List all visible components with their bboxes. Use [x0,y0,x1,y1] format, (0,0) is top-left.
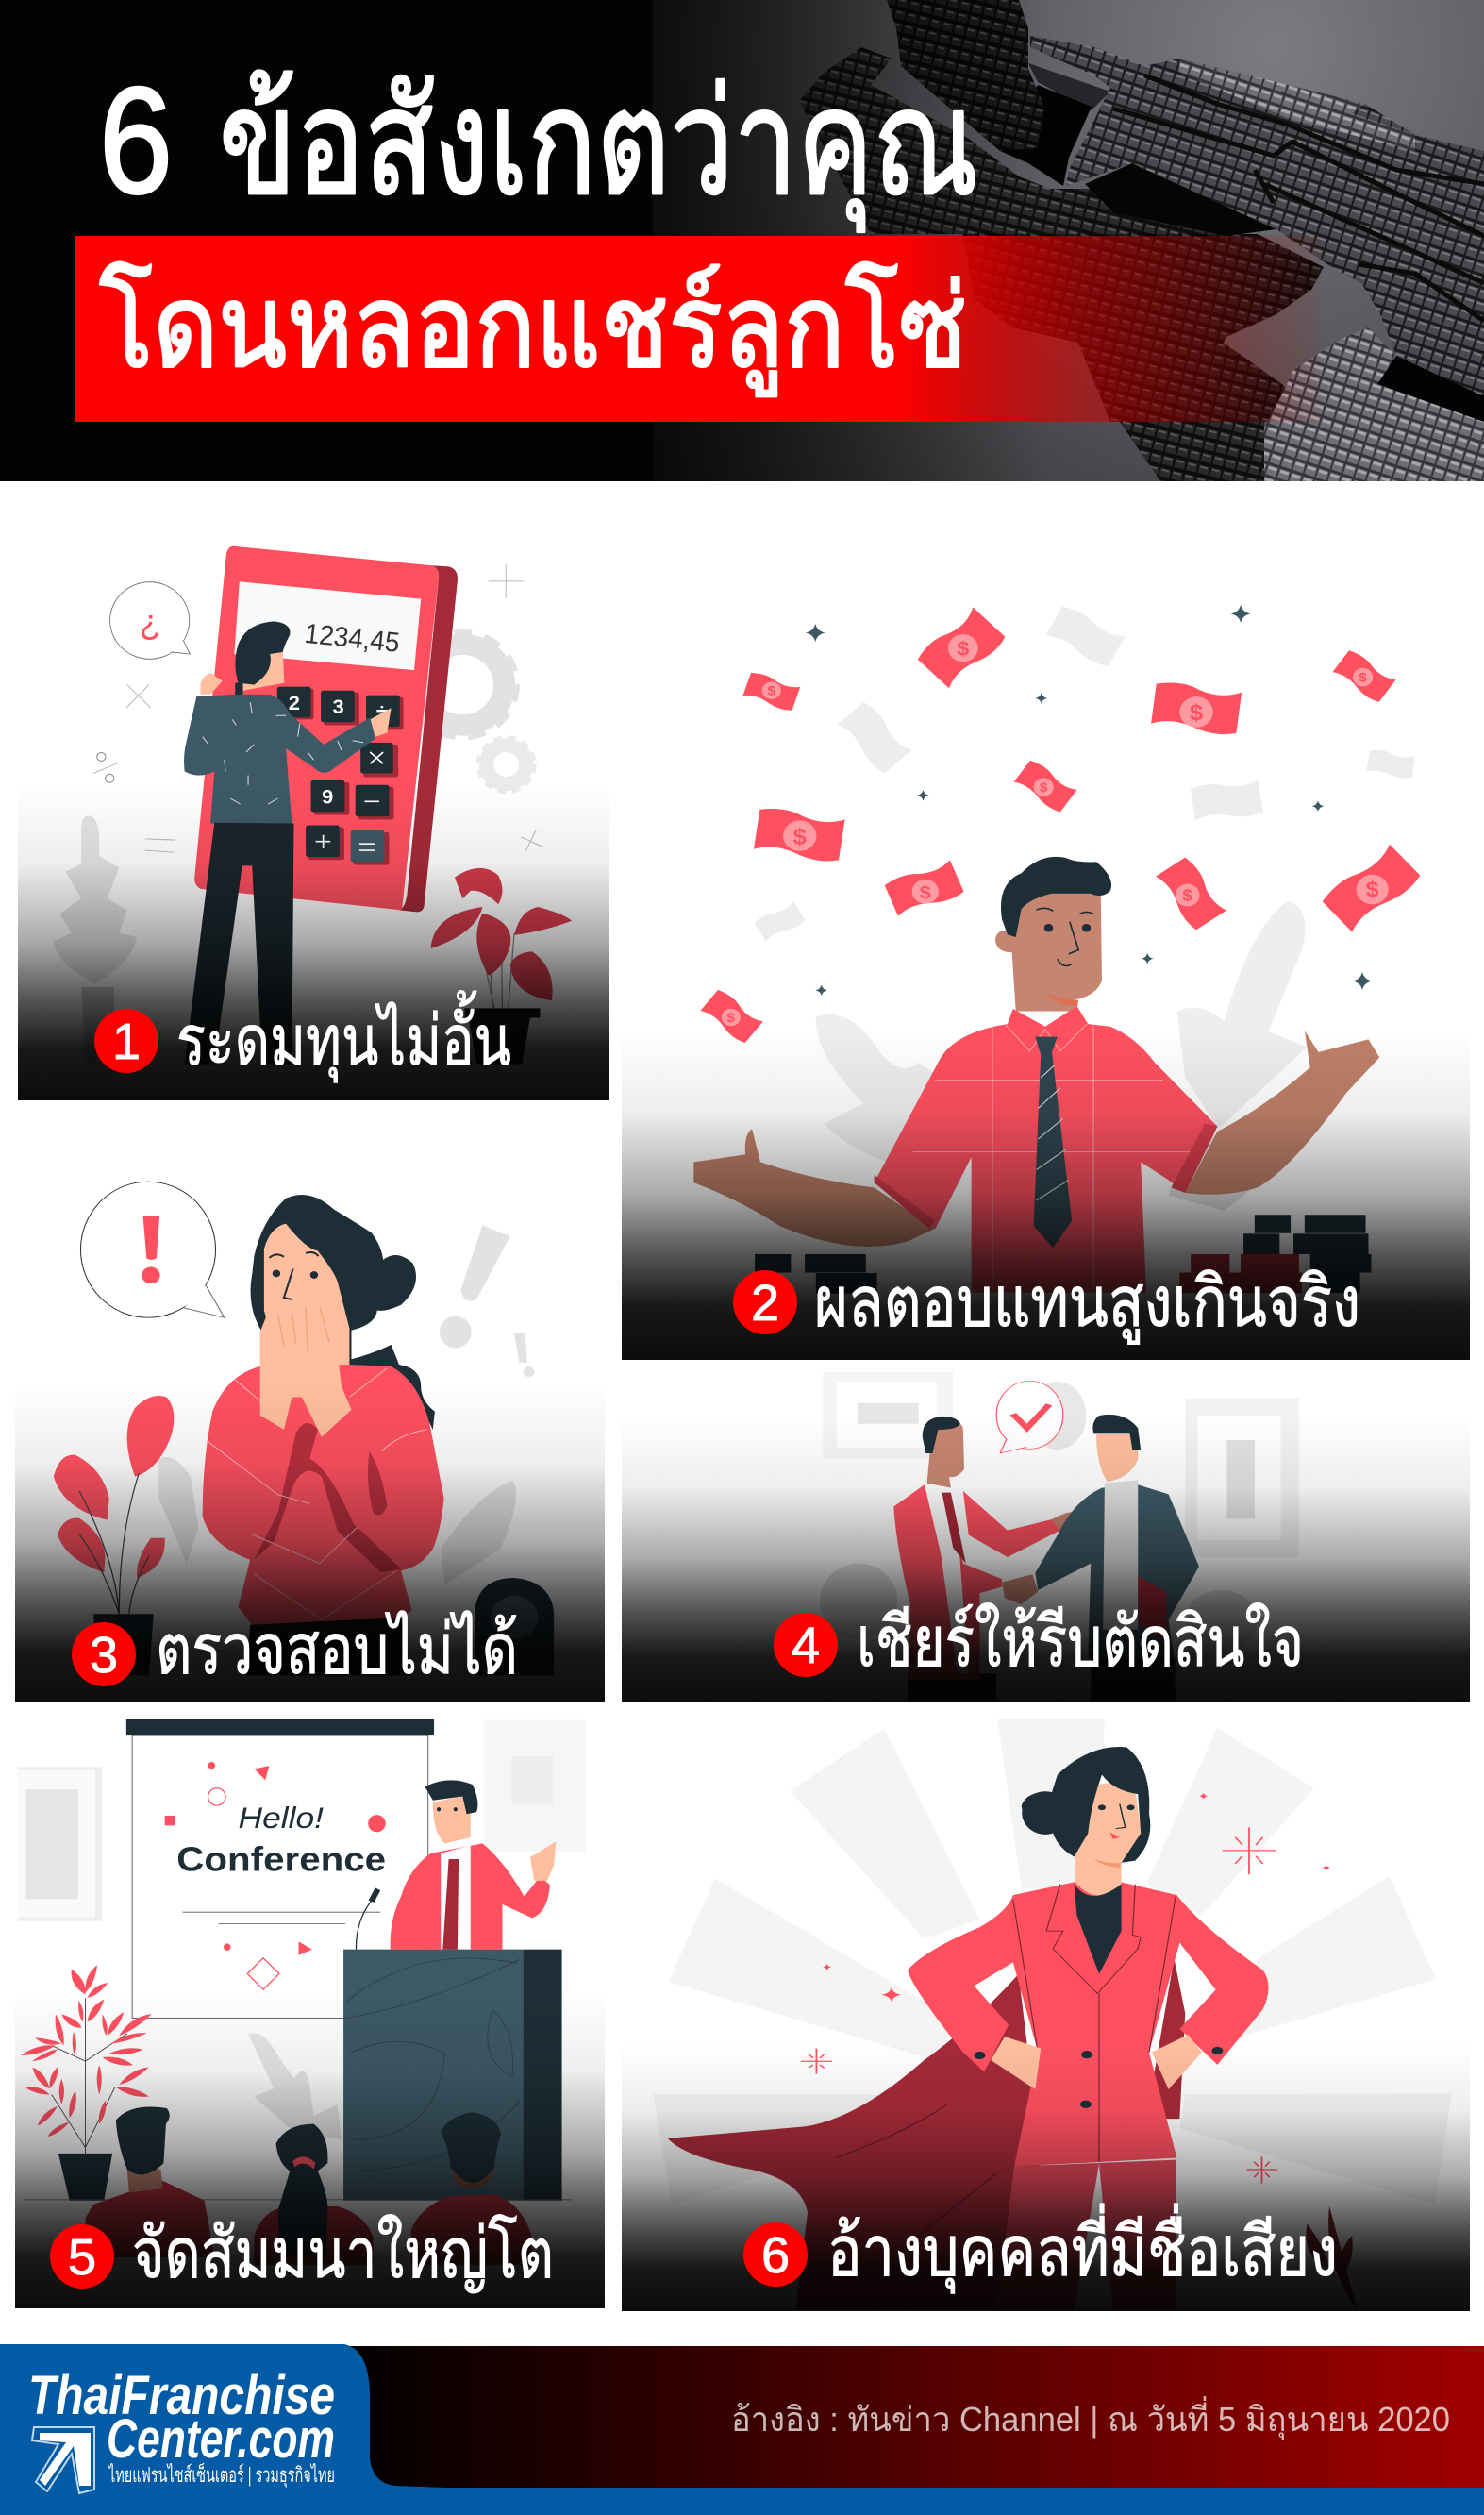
fade overlay [622,1029,1470,1360]
logo panel [0,2344,472,2515]
panel 1: calculator [18,546,609,1100]
illustration: man with falling money: $ [1359,671,1367,685]
illustration: conference stage [18,1719,586,2265]
badge 3: 3 [90,1627,118,1684]
badge 6 [743,2222,808,2287]
badge 1: 1 [112,1014,141,1070]
illustration: man at giant calculator: 2 [289,691,300,714]
label 5: จัดสัมมนาใหญ่โต [132,2214,554,2293]
blue base [0,2482,1484,2515]
illustration: man with falling money: $ [1040,781,1047,796]
hero header [0,0,1484,481]
illustration: man with falling money [693,604,1423,1294]
footer [0,2344,1484,2515]
illustration: man at giant calculator: 9 [322,785,333,808]
badge 6: 6 [761,2227,790,2284]
logo wordmark: Center.com [107,2408,335,2470]
illustration: man with falling money: $ [767,684,775,698]
illustration: woman with cape [653,1719,1452,2310]
illustration: man with falling money: $ [793,824,807,849]
fade overlay [15,1991,605,2308]
badge 5: 5 [68,2229,96,2286]
panel 3: shocked woman [15,1182,605,1702]
badge 4 [774,1613,838,1677]
illustration: conference stage: Conference [176,1840,386,1878]
badge 2 [733,1270,797,1334]
illustration: man with falling money: $ [920,882,931,903]
red banner [75,236,1321,422]
badge 3 [72,1622,136,1686]
logo wordmark: ThaiFranchise [28,2365,335,2426]
logo arrow icon [32,2427,94,2493]
badge 4: 4 [792,1618,820,1674]
chain image [651,0,1484,481]
fade overlay [15,1383,605,1702]
illustration: conference stage: Hello! [239,1801,324,1835]
label 2: ผลตอบแทนสูงเกินจริง [814,1263,1360,1345]
panel 6: heroine [622,1719,1470,2311]
illustration: man with falling money: $ [957,637,970,660]
illustration: man at giant calculator: 3 [333,696,344,718]
fade overlay [622,2042,1470,2311]
badge 2: 2 [751,1275,779,1332]
source credit: อ้างอิง : ทันข่าว Channel | ณ วันที่ 5 มิถุนายน 2020 [731,2396,1450,2440]
title line 2: โดนหลอกแชร์ลูกโซ่ [99,262,967,396]
label 6: อ้างบุคคลที่มีชื่อเสียง [827,2203,1338,2294]
fade overlay [622,1416,1470,1702]
title line 1: 6 [99,56,173,225]
illustration: man with falling money: $ [1366,879,1378,902]
illustration: man with falling money: $ [1190,700,1203,726]
illustration: man at giant calculator: ÷ [376,699,388,722]
illustration: man at giant calculator: ¿ [140,602,161,641]
illustration: man at giant calculator: 1234,45 [303,618,401,659]
gradient bar [283,2346,1484,2488]
illustration: woman covering mouth [54,1182,554,1675]
illustration: two men shaking hands [820,1372,1299,1702]
fade overlay [18,783,609,1100]
label 3: ตรวจสอบไม่ได้ [156,1610,518,1688]
badge 5 [50,2224,114,2289]
illustration: man with falling money: $ [1182,886,1192,904]
label 1: ระดมทุนไม่อั้น [176,990,511,1083]
label 4: เชียร์ให้รีบตัดสินใจ [857,1602,1304,1681]
logo wordmark [28,2365,335,2470]
title line 1: ข้อสังเกตว่าคุณ [219,61,978,233]
illustration: man at giant calculator [54,546,572,1065]
badge 1 [94,1009,158,1073]
illustration: man with falling money: $ [727,1011,735,1026]
logo tagline: ไทยแฟรนไชส์เซ็นเตอร์ | รวมธุรกิจไทย [108,2461,335,2488]
panel 4: handshake [622,1372,1470,1702]
title line 1 [99,56,978,233]
panel 5: conference [15,1719,605,2308]
panel 2: money rain [622,604,1470,1360]
